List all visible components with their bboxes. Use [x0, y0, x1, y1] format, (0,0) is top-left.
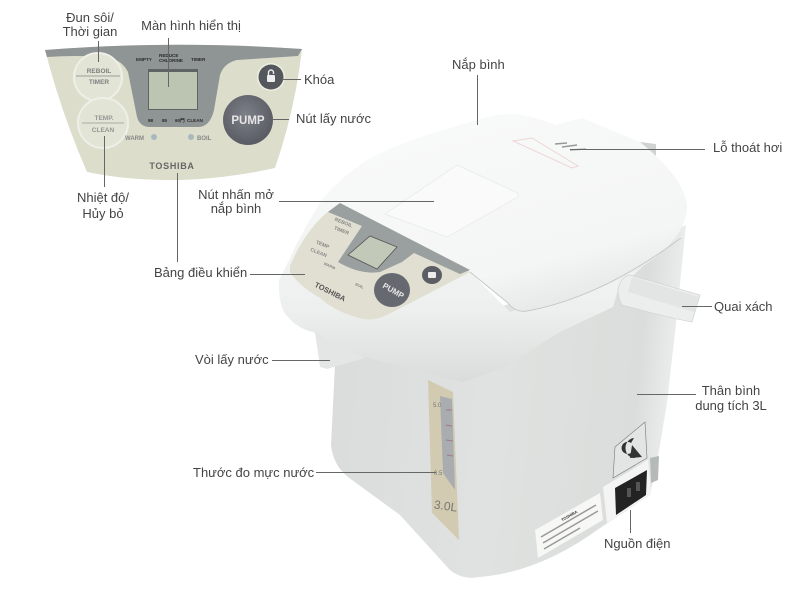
lid — [323, 114, 687, 311]
callout: lock: Khóa — [304, 72, 335, 87]
pot button labels — [309, 217, 365, 290]
callout: body capacity — [637, 383, 767, 413]
warm and boil indicators: BOIL — [197, 136, 212, 142]
indicator labels: CLEAN — [187, 118, 204, 123]
callout: lock — [282, 72, 335, 87]
lid seam — [470, 238, 681, 311]
water level gauge: 3.0L — [433, 497, 458, 515]
button: reboil timer: REBOIL — [87, 68, 111, 75]
indicator labels: 60門 — [175, 117, 185, 124]
callout: power socket: Nguồn điện — [604, 536, 670, 551]
button: temp clean: CLEAN — [92, 127, 114, 134]
head unit — [279, 198, 686, 382]
pot lock button — [422, 266, 442, 284]
callout: water gauge: Thước đo mực nước — [193, 465, 315, 480]
callout: spout — [195, 352, 330, 367]
indicator labels: 85 — [162, 118, 168, 123]
button: temp clean — [78, 98, 128, 148]
callout: reboil timer: Thời gian — [63, 24, 117, 39]
callout: temp clean: Hủy bỏ — [82, 206, 124, 221]
panel plate — [45, 45, 302, 180]
control panel close-up — [45, 45, 302, 180]
pot control panel — [290, 203, 470, 320]
indicator labels: EMPTY — [136, 57, 152, 62]
pot brand: TOSHIBA — [313, 280, 348, 304]
button: reboil timer: TIMER — [89, 79, 109, 86]
button: pump — [223, 95, 273, 145]
pot button labels: CLEAN — [309, 247, 328, 259]
indicator labels: REDUCE — [159, 53, 178, 58]
rating label: TOSHIBA — [560, 509, 578, 522]
button: lock — [257, 63, 285, 91]
indicator labels — [136, 53, 206, 124]
pot display — [348, 236, 397, 269]
panel grey band — [45, 45, 302, 127]
pot button labels: REBOIL — [333, 217, 353, 229]
callout: reboil timer: Đun sôi/ — [66, 10, 114, 25]
water boiler product — [279, 114, 700, 578]
lid release button — [385, 165, 518, 237]
callout: spout: Vòi lấy nước — [195, 352, 269, 367]
display — [148, 69, 198, 110]
indicator labels: TIMER — [191, 57, 206, 62]
water level gauge: 5.0 — [433, 403, 442, 409]
callout: body capacity: Thân bình — [702, 383, 760, 398]
pot pump button: PUMP — [381, 281, 406, 301]
pot button labels: TIMER — [333, 225, 350, 237]
callout: temp clean: Nhiệt độ/ — [77, 190, 129, 205]
pot button labels: WARM — [323, 262, 336, 270]
callout: control panel: Bảng điều khiển — [154, 265, 247, 280]
callout: reboil timer — [63, 10, 117, 62]
callout: handle: Quai xách — [714, 299, 773, 314]
callout: pump button: Nút lấy nước — [296, 111, 372, 126]
pot button labels: TEMP — [315, 240, 331, 251]
pot button labels: BOIL — [354, 282, 365, 290]
water level gauge — [428, 380, 459, 540]
callout: lid: Nắp bình — [452, 57, 505, 72]
callout: lid release: nắp bình — [211, 201, 261, 216]
button: temp clean: TEMP. — [94, 115, 114, 122]
callout: display — [141, 18, 241, 87]
steam vent — [513, 138, 586, 168]
spout — [315, 332, 365, 369]
callout: body capacity: dung tích 3L — [695, 398, 767, 413]
callout: lid — [452, 57, 505, 125]
brand: TOSHIBA — [149, 161, 195, 171]
power socket — [603, 456, 659, 523]
pot panel grey — [328, 203, 470, 274]
back vent tab — [640, 142, 656, 160]
button: reboil timer — [74, 53, 122, 101]
callout: display: Màn hình hiển thị — [141, 18, 241, 33]
callout: temp clean — [77, 136, 129, 221]
body — [331, 225, 686, 578]
indicator labels: 98 — [148, 118, 154, 123]
indicator labels: CHLORINE — [159, 58, 183, 63]
pot panel plate — [290, 203, 470, 320]
callout: lid release — [198, 187, 434, 216]
recycling sticker — [613, 422, 647, 478]
warm and boil indicators — [125, 134, 212, 142]
water level gauge: 0.5 — [434, 471, 443, 477]
rating label — [535, 493, 603, 558]
pot pump button — [374, 273, 410, 307]
callout: lid release: Nút nhấn mở — [198, 187, 274, 202]
button: pump: PUMP — [231, 115, 265, 127]
callout: steam vent: Lỗ thoát hơi — [713, 140, 782, 155]
carry handle — [618, 275, 700, 322]
warm and boil indicators: WARM — [125, 136, 144, 142]
callout: handle — [682, 299, 773, 314]
callout: power socket — [604, 510, 670, 551]
